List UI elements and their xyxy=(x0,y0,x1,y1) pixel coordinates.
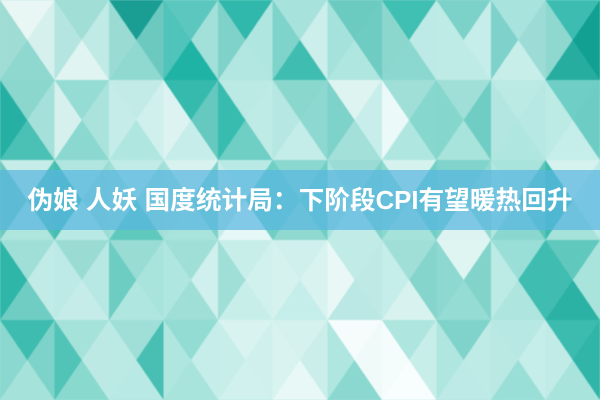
title: 伪娘 人妖 国度统计局：下阶段CPI有望暖热回升 xyxy=(27,187,573,215)
title band xyxy=(0,170,600,230)
